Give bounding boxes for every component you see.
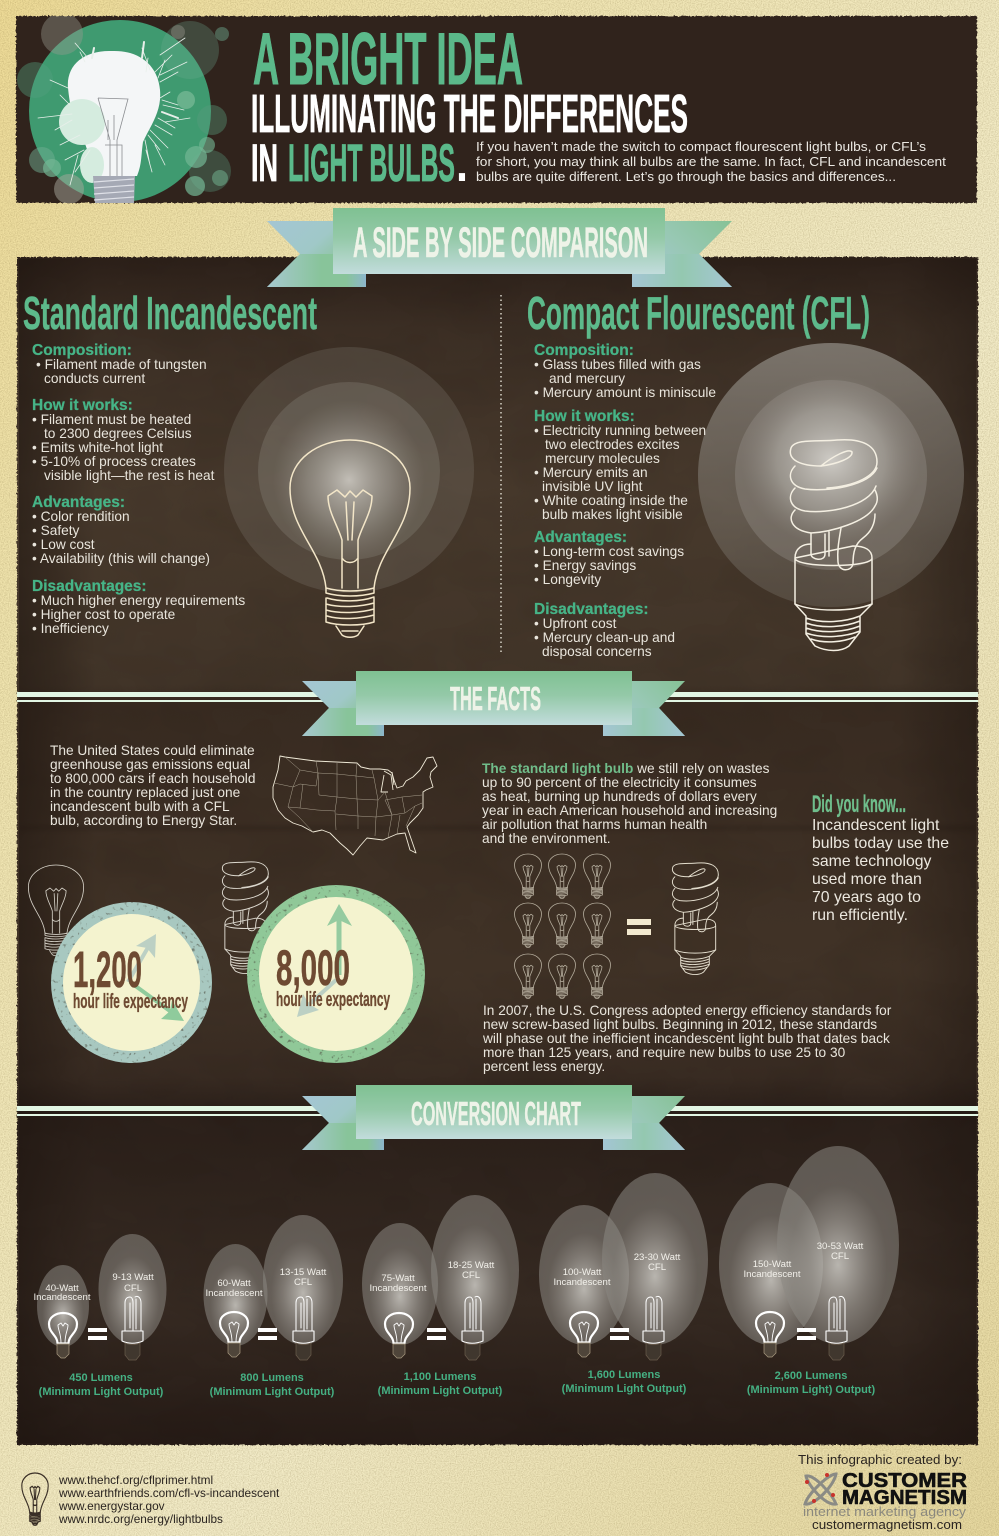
text: cfl details: • White coating inside the <box>534 493 688 508</box>
group: 1,600 lumens: CFL <box>648 1262 667 1273</box>
group: 1,600 lumens: 1,600 Lumens <box>588 1369 660 1381</box>
text: standard light bulb paragraph: air pollution that harms human health <box>482 817 707 832</box>
heading: standard incandescent: Standard Incandescent <box>23 287 317 339</box>
group: 800 lumens: Incandescent <box>205 1288 263 1299</box>
credit: customer magnetism: CUSTOMER <box>842 1470 968 1492</box>
text: incandescent details <box>32 342 245 636</box>
text: standard light bulb paragraph: The standard light bulb we still rely on wastes <box>482 761 770 776</box>
group: 2,600 lumens <box>743 1241 875 1396</box>
group: 1,100 lumens: 18-25 Watt <box>448 1260 495 1271</box>
intro paragraph: bulbs are quite different. Let’s go through the basics and differences... <box>476 169 896 184</box>
circle: 1,200 hour life expectancy: 1,200 <box>73 941 142 998</box>
text: cfl details: • Energy savings <box>534 558 636 573</box>
icon: incandescent outline behind circle <box>28 865 84 956</box>
text: incandescent details: • Emits white-hot light <box>32 440 163 455</box>
text: greenhouse gas fact: bulb, according to Energy Star. <box>50 813 237 828</box>
group: 1,100 lumens: 1,100 Lumens <box>404 1371 476 1383</box>
group: 450 lumens: Incandescent <box>33 1292 91 1303</box>
text: congress paragraph: percent less energy. <box>483 1059 605 1074</box>
text: incandescent details: to 2300 degrees Celsius <box>44 426 192 441</box>
group: 2,600 lumens: Incandescent <box>743 1269 801 1280</box>
callout: did you know: Incandescent light <box>812 817 940 834</box>
text: cfl details: bulb makes light visible <box>542 507 683 522</box>
icons: nine incandescent bulbs equal one cfl <box>514 854 718 998</box>
group: 1,600 lumens: 100-Watt <box>563 1267 602 1278</box>
group: 800 lumens: (Minimum Light Output) <box>210 1386 335 1398</box>
intro paragraph <box>476 139 946 184</box>
text: cfl details: Advantages: <box>534 529 627 546</box>
illustration: splattered light bulb <box>17 13 231 204</box>
text: incandescent details: • Safety <box>32 523 80 538</box>
callout: did you know <box>812 791 949 924</box>
text: standard light bulb paragraph: year in each American household and increasing <box>482 803 777 818</box>
text: cfl details: invisible UV light <box>542 479 643 494</box>
text: incandescent details: How it works: <box>32 397 133 414</box>
text: cfl details: • Longevity <box>534 572 601 587</box>
credit: customer magnetism: internet marketing agency <box>803 1504 967 1519</box>
map: united states <box>273 756 437 855</box>
text: cfl details: mercury molecules <box>545 451 660 466</box>
callout: did you know: same technology <box>812 853 932 870</box>
text: incandescent details: • Much higher energy requirements <box>32 593 245 608</box>
icon: cfl outline behind circle <box>222 862 268 974</box>
text: greenhouse gas fact <box>50 743 255 828</box>
group: 1,100 lumens <box>369 1260 503 1397</box>
group: 1,600 lumens <box>553 1252 687 1395</box>
ribbon: the facts <box>302 671 685 736</box>
group: 2,600 lumens: (Minimum Light) Output) <box>747 1384 875 1396</box>
ribbon: the facts: THE FACTS <box>450 680 541 717</box>
text: incandescent details: • 5-10% of process creates <box>32 454 196 469</box>
text: cfl details: Composition: <box>534 342 634 359</box>
group: 1,600 lumens: Incandescent <box>553 1277 611 1288</box>
callout: did you know: Did you know... <box>812 791 906 818</box>
text: source links: www.energystar.gov <box>58 1499 165 1513</box>
text: incandescent details: Advantages: <box>32 494 125 511</box>
group: 800 lumens: 60-Watt <box>217 1278 251 1289</box>
ribbon: conversion chart: CONVERSION CHART <box>411 1095 581 1132</box>
ribbon: conversion chart <box>302 1085 685 1150</box>
ribbon: a side by side comparison: A SIDE BY SIDE COMPARISON <box>353 219 648 267</box>
text: incandescent details: • Low cost <box>32 537 95 552</box>
group: 800 lumens <box>205 1267 335 1398</box>
text: incandescent details: • Filament made of tungsten <box>36 357 207 372</box>
icon: magnet logo <box>805 1473 836 1504</box>
icon: footer bulb <box>22 1473 48 1525</box>
group: 1,100 lumens: Incandescent <box>369 1283 427 1294</box>
title word: in: IN <box>251 134 278 193</box>
text: incandescent details: Disadvantages: <box>32 578 147 595</box>
callout: did you know: used more than <box>812 871 922 888</box>
text: cfl details <box>534 342 716 659</box>
circle: 8,000 hour life expectancy <box>253 891 419 1057</box>
text: incandescent details: Composition: <box>32 342 132 359</box>
circle: 1,200 hour life expectancy <box>57 908 206 1057</box>
credit: customer magnetism: MAGNETISM <box>842 1487 967 1509</box>
text: congress paragraph: In 2007, the U.S. Congress adopted energy efficiency standards for <box>483 1003 892 1018</box>
group: 2,600 lumens: 30-53 Watt <box>817 1241 864 1252</box>
text: cfl details: • Upfront cost <box>534 616 617 631</box>
text: cfl details: • Long-term cost savings <box>534 544 684 559</box>
group: 450 lumens: 9-13 Watt <box>112 1272 154 1283</box>
intro paragraph: for short, you may think all bulbs are the same. In fact, CFL and incandescent <box>476 154 946 169</box>
circle: 1,200 hour life expectancy: hour life expectancy <box>73 991 189 1013</box>
group: 1,100 lumens: (Minimum Light Output) <box>378 1385 503 1397</box>
panel: main dark background <box>17 257 978 1445</box>
text: greenhouse gas fact: incandescent bulb with a CFL <box>50 799 230 814</box>
text: congress paragraph <box>482 1003 892 1074</box>
group: 1,600 lumens: (Minimum Light Output) <box>562 1383 687 1395</box>
panel: header: A BRIGHT IDEA <box>253 19 523 100</box>
panel: header <box>16 13 977 204</box>
text: source links: www.earthfriends.com/cfl-vs-incandescent <box>58 1486 280 1500</box>
group: 2,600 lumens: 150-Watt <box>753 1259 792 1270</box>
circle: 8,000 hour life expectancy: hour life expectancy <box>276 989 391 1011</box>
credit: customer magnetism: This infographic created by: <box>798 1453 962 1467</box>
text: source links: www.nrdc.org/energy/lightbulbs <box>58 1512 223 1526</box>
group: 800 lumens: CFL <box>294 1277 313 1288</box>
text: standard light bulb paragraph <box>482 761 777 846</box>
text: greenhouse gas fact: The United States could eliminate <box>50 743 255 758</box>
text: source links: www.thehcf.org/cflprimer.html <box>58 1473 213 1487</box>
text: incandescent details: conducts current <box>44 371 145 386</box>
callout: did you know: 70 years ago to <box>812 889 921 906</box>
text: congress paragraph: new screw-based light bulbs. Beginning in 2012, these standards <box>483 1017 877 1032</box>
text: incandescent details: • Availability (this will change) <box>32 551 210 566</box>
text: incandescent details: • Higher cost to operate <box>32 607 175 622</box>
text: greenhouse gas fact: in the country replaced just one <box>50 785 240 800</box>
title period: . <box>456 134 468 193</box>
text: cfl details: two electrodes excites <box>545 437 680 452</box>
group: 2,600 lumens: 2,600 Lumens <box>775 1370 847 1382</box>
credit: customer magnetism <box>798 1453 968 1532</box>
text: cfl details: and mercury <box>549 371 625 386</box>
group: 450 lumens <box>33 1272 164 1398</box>
text: cfl details: • Mercury clean-up and <box>534 630 675 645</box>
divider: dotted <box>500 295 502 652</box>
text: incandescent details: • Filament must be heated <box>32 412 191 427</box>
text: standard light bulb paragraph: up to 90 percent of the electricity it consumes <box>482 775 757 790</box>
panel: header: LIGHT BULBS <box>288 134 455 193</box>
text: cfl details: • Mercury emits an <box>534 465 648 480</box>
text: greenhouse gas fact: greenhouse gas emissions equal <box>50 757 250 772</box>
group: 800 lumens: 13-15 Watt <box>280 1267 327 1278</box>
text: cfl details: • Mercury amount is miniscule <box>534 385 716 400</box>
text: greenhouse gas fact: to 800,000 cars if each household <box>50 771 255 786</box>
illustration: cfl bulb with glow <box>698 343 964 650</box>
group: 1,100 lumens: 75-Watt <box>381 1273 415 1284</box>
text: cfl details: • Glass tubes filled with gas <box>534 357 701 372</box>
group: 1,600 lumens: 23-30 Watt <box>634 1252 681 1263</box>
text: incandescent details: • Color rendition <box>32 509 130 524</box>
group: 1,100 lumens: CFL <box>462 1270 481 1281</box>
text: incandescent details: visible light—the rest is heat <box>44 468 215 483</box>
ribbon: a side by side comparison <box>267 208 732 287</box>
group: 450 lumens: 450 Lumens <box>69 1372 133 1384</box>
text: standard light bulb paragraph: and the environment. <box>482 831 611 846</box>
text: cfl details: disposal concerns <box>542 644 652 659</box>
group: 450 lumens: (Minimum Light Output) <box>39 1386 164 1398</box>
text: cfl details: Disadvantages: <box>534 601 649 618</box>
group: 450 lumens: 40-Watt <box>45 1283 79 1294</box>
callout: did you know: bulbs today use the <box>812 835 949 852</box>
group: 800 lumens: 800 Lumens <box>240 1372 304 1384</box>
circle: 8,000 hour life expectancy: 8,000 <box>276 940 350 996</box>
credit: customer magnetism: customermagnetism.com <box>812 1518 962 1532</box>
group: 450 lumens: CFL <box>124 1283 143 1294</box>
text: congress paragraph: will phase out the inefficient incandescent light bulb that dates back <box>482 1031 890 1046</box>
group: 2,600 lumens: CFL <box>831 1251 850 1262</box>
text: cfl details: How it works: <box>534 408 635 425</box>
illustration: incandescent bulb with glow <box>224 347 474 637</box>
text: standard light bulb paragraph: as heat, burning up hundreds of dollars every <box>482 789 757 804</box>
intro paragraph: If you haven’t made the switch to compact flourescent light bulbs, or CFL’s <box>476 139 927 154</box>
text: incandescent details: • Inefficiency <box>32 621 109 636</box>
text: source links <box>58 1473 280 1526</box>
text: congress paragraph: more than 125 years, and require new bulbs to use 25 to 30 <box>483 1045 846 1060</box>
callout: did you know: run efficiently. <box>812 907 908 924</box>
chart: wattage conversion glows <box>37 1146 899 1347</box>
text: cfl details: • Electricity running between <box>534 423 706 438</box>
